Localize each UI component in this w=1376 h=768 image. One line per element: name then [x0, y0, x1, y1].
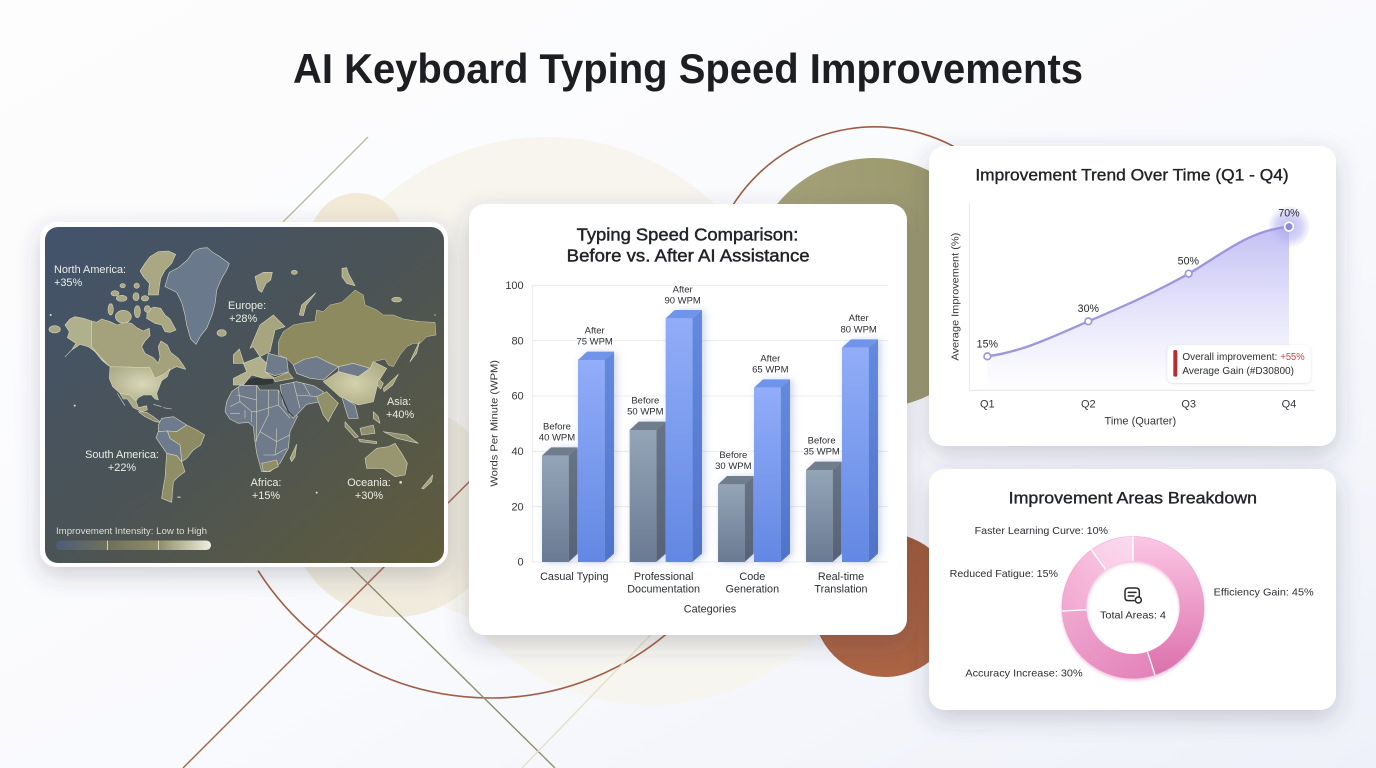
callout: Average Gain (#D30800)	[1182, 366, 1294, 377]
donut segment labels: Faster Learning Curve: 10%	[975, 526, 1108, 537]
y axis and gridlines: 60	[511, 391, 524, 403]
label: europe: Europe:	[228, 300, 266, 312]
bar value labels: 40 WPM	[539, 432, 575, 443]
bar value labels: Before	[543, 421, 571, 432]
bar value labels	[539, 284, 877, 472]
category labels	[540, 571, 868, 616]
trend axes: Q3	[1181, 398, 1196, 410]
trend data labels: 30%	[1078, 303, 1100, 315]
category labels: Translation	[814, 584, 868, 596]
label: oceania: +30%	[355, 490, 383, 502]
trend axes: Q2	[1081, 398, 1096, 410]
world map shapes	[49, 248, 436, 502]
bar value labels: 50 WPM	[627, 407, 664, 418]
donut segment labels: Accuracy Increase: 30%	[965, 669, 1083, 680]
trend axes: Time (Quarter)	[1105, 415, 1176, 427]
label: europe: +28%	[229, 313, 257, 325]
panel: world map	[40, 222, 448, 567]
callout: Overall improvement:	[1182, 352, 1277, 363]
label: south america: +22%	[108, 462, 136, 474]
label: north america: +35%	[54, 277, 82, 289]
trend area and line	[984, 206, 1310, 390]
bar value labels: After	[849, 313, 869, 324]
bar value labels: After	[585, 326, 605, 337]
label: africa: Africa:	[251, 477, 281, 489]
bar value labels: 75 WPM	[576, 337, 613, 348]
trend data labels: 50%	[1178, 255, 1200, 267]
bar value labels: Before	[719, 450, 747, 461]
bar chart heading: Typing Speed Comparison:	[577, 224, 798, 244]
icon: document with badge	[1125, 588, 1141, 603]
bar value labels: 80 WPM	[840, 324, 877, 335]
category labels: Documentation	[627, 584, 700, 596]
y axis and gridlines: 0	[518, 557, 524, 569]
category labels: Generation	[726, 584, 779, 596]
panel: bar chart	[469, 204, 907, 635]
trend axes: Q1	[980, 398, 995, 410]
bar value labels: 65 WPM	[752, 364, 789, 375]
label: africa: +15%	[252, 490, 280, 502]
bar chart heading	[567, 224, 810, 266]
donut ring	[1062, 536, 1204, 678]
category labels: Real-time	[818, 571, 864, 583]
bars: professional documentation	[630, 310, 702, 562]
panel: donut chart	[929, 469, 1336, 710]
trend axes	[950, 203, 1314, 427]
label: north america: North America:	[54, 264, 126, 276]
trend data labels: 70%	[1278, 207, 1300, 219]
title: AI Keyboard Typing Speed Improvements	[293, 45, 1083, 92]
panel: trend line chart	[929, 146, 1336, 446]
bar value labels: Before	[808, 436, 836, 447]
trend axes: Average Improvement (%)	[950, 233, 961, 361]
y axis and gridlines: 40	[511, 446, 524, 458]
y axis and gridlines	[489, 280, 888, 569]
bar value labels: 90 WPM	[664, 295, 701, 306]
category labels: Code	[739, 571, 765, 583]
label: south america: South America:	[85, 449, 159, 461]
trend heading: Improvement Trend Over Time (Q1 - Q4)	[975, 166, 1289, 185]
donut segment labels: Efficiency Gain: 45%	[1214, 587, 1314, 598]
decorative background shapes	[183, 127, 999, 768]
category labels: Categories	[684, 604, 737, 616]
map region labels	[54, 264, 414, 502]
donut center label: Total Areas: 4	[1100, 611, 1166, 622]
bars: casual typing	[542, 352, 614, 562]
donut segment labels	[950, 526, 1314, 680]
trend data labels: 15%	[977, 338, 999, 350]
y axis and gridlines: Words Per Minute (WPM)	[489, 360, 500, 487]
category labels: Casual Typing	[540, 571, 609, 583]
bar value labels: 35 WPM	[803, 447, 840, 458]
trend axes: Q4	[1282, 398, 1296, 410]
category labels: Professional	[634, 571, 693, 583]
donut heading: Improvement Areas Breakdown	[1009, 488, 1257, 507]
donut segment labels: Reduced Fatigue: 15%	[950, 569, 1058, 580]
trend data labels	[977, 207, 1300, 350]
map legend	[56, 526, 211, 550]
y axis and gridlines: 20	[511, 501, 524, 513]
y axis and gridlines: 100	[505, 280, 524, 292]
label: asia: Asia:	[387, 396, 411, 408]
bars: code generation	[718, 379, 790, 562]
y axis and gridlines: 80	[511, 335, 524, 347]
bar value labels: 30 WPM	[715, 461, 752, 472]
callout: +55%	[1280, 352, 1305, 363]
label: asia: +40%	[386, 409, 414, 421]
bar value labels: Before	[631, 396, 659, 407]
bar value labels: After	[673, 284, 693, 295]
bars: real-time translation	[806, 339, 878, 562]
map legend: Improvement Intensity: Low to High	[56, 526, 207, 536]
bar value labels: After	[760, 353, 780, 364]
bar chart heading: Before vs. After AI Assistance	[567, 246, 810, 266]
bars	[542, 310, 878, 562]
callout	[1167, 345, 1311, 383]
label: oceania: Oceania:	[347, 477, 391, 489]
